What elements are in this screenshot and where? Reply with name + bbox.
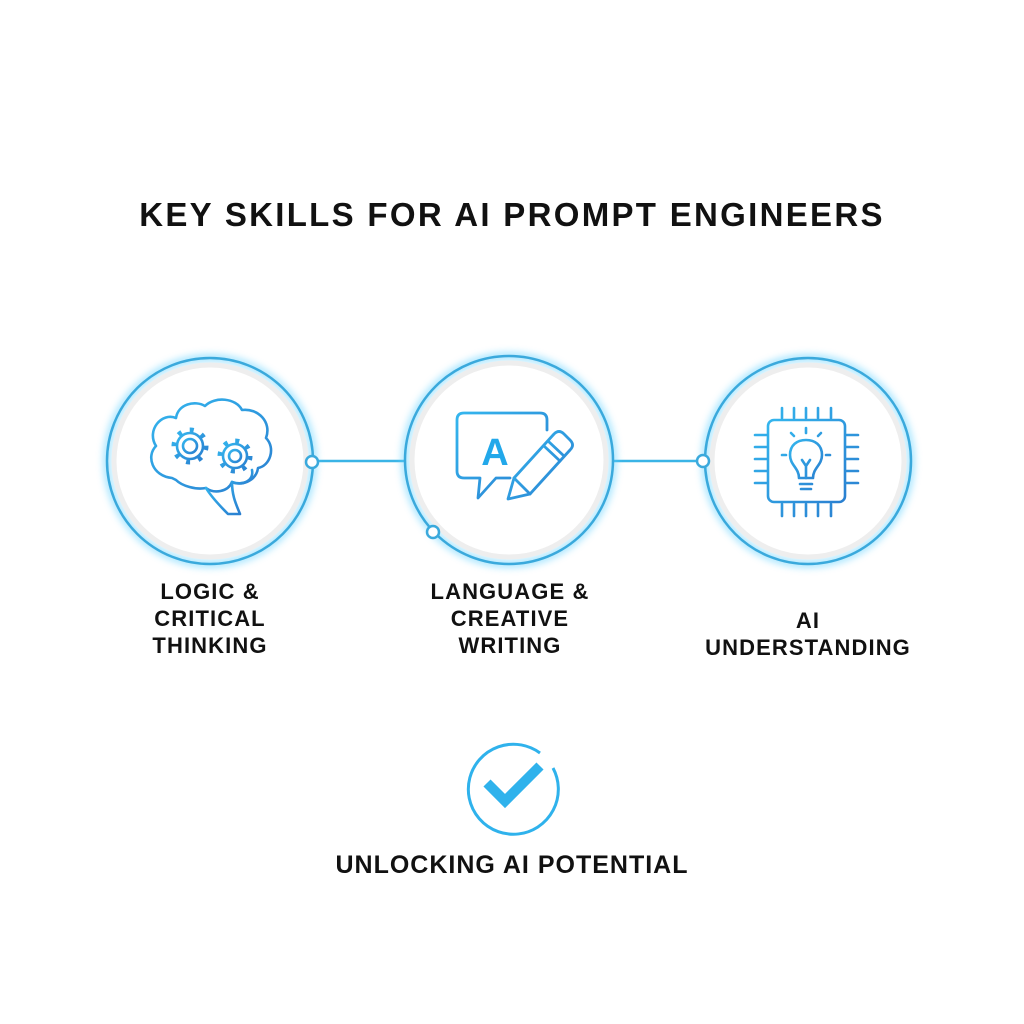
label: logic: CRITICAL (154, 606, 266, 631)
label: language: LANGUAGE & (431, 579, 589, 604)
circle 2: language: A (481, 432, 509, 474)
label: AI understanding (705, 608, 911, 660)
connector dot (306, 456, 318, 468)
title: KEY SKILLS FOR AI PROMPT ENGINEERS (139, 196, 885, 233)
circle 1: logic (107, 358, 318, 564)
label: language: WRITING (458, 633, 562, 658)
footer text: UNLOCKING AI POTENTIAL (335, 851, 688, 879)
icon: checkmark circle (468, 744, 558, 834)
label: language: CREATIVE (451, 606, 569, 631)
label: AI understanding: UNDERSTANDING (705, 635, 911, 660)
circle 3: AI understanding (697, 358, 911, 564)
connector dot (427, 526, 439, 538)
icon: speech bubble with A and pencil (457, 413, 572, 499)
label: logic: LOGIC & (160, 579, 260, 604)
icon: brain with gears (151, 400, 271, 514)
label: logic (152, 579, 268, 658)
connector dot (697, 455, 709, 467)
label: AI understanding: AI (796, 608, 820, 633)
label: logic: THINKING (152, 633, 268, 658)
icon: chip with lightbulb (755, 408, 858, 516)
label: language (431, 579, 589, 658)
circle 2: language (405, 356, 613, 564)
connector lines (312, 460, 703, 462)
